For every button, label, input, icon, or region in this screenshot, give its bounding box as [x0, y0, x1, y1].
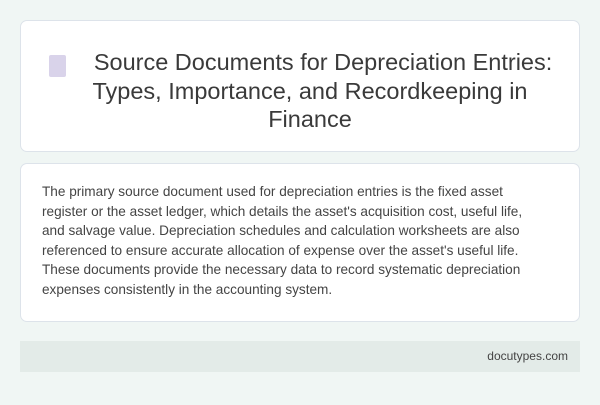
- text block: [42, 184, 522, 297]
- title: Source Documents for Depreciation Entries: Types, Importance, and Recordkeeping in Finance: [92, 49, 552, 132]
- text block: expenses consistently in the accounting system.: [42, 282, 332, 296]
- text block: register or the asset ledger, which details the asset's acquisition cost, useful life,: [42, 204, 522, 218]
- text block: The primary source document used for depreciation entries is the fixed asset: [42, 184, 503, 199]
- icon: document: [49, 55, 66, 77]
- text block: These documents provide the necessary data to record systematic depreciation: [42, 262, 520, 277]
- panel: description: [20, 163, 580, 322]
- panel: title card: [20, 20, 580, 152]
- text block: referenced to ensure accurate allocation of expense over the asset's useful life.: [42, 242, 518, 258]
- text block: and salvage value. Depreciation schedules and calculation worksheets are also: [42, 223, 520, 238]
- footer: docutypes.com: [487, 349, 568, 363]
- footer: [20, 341, 580, 372]
